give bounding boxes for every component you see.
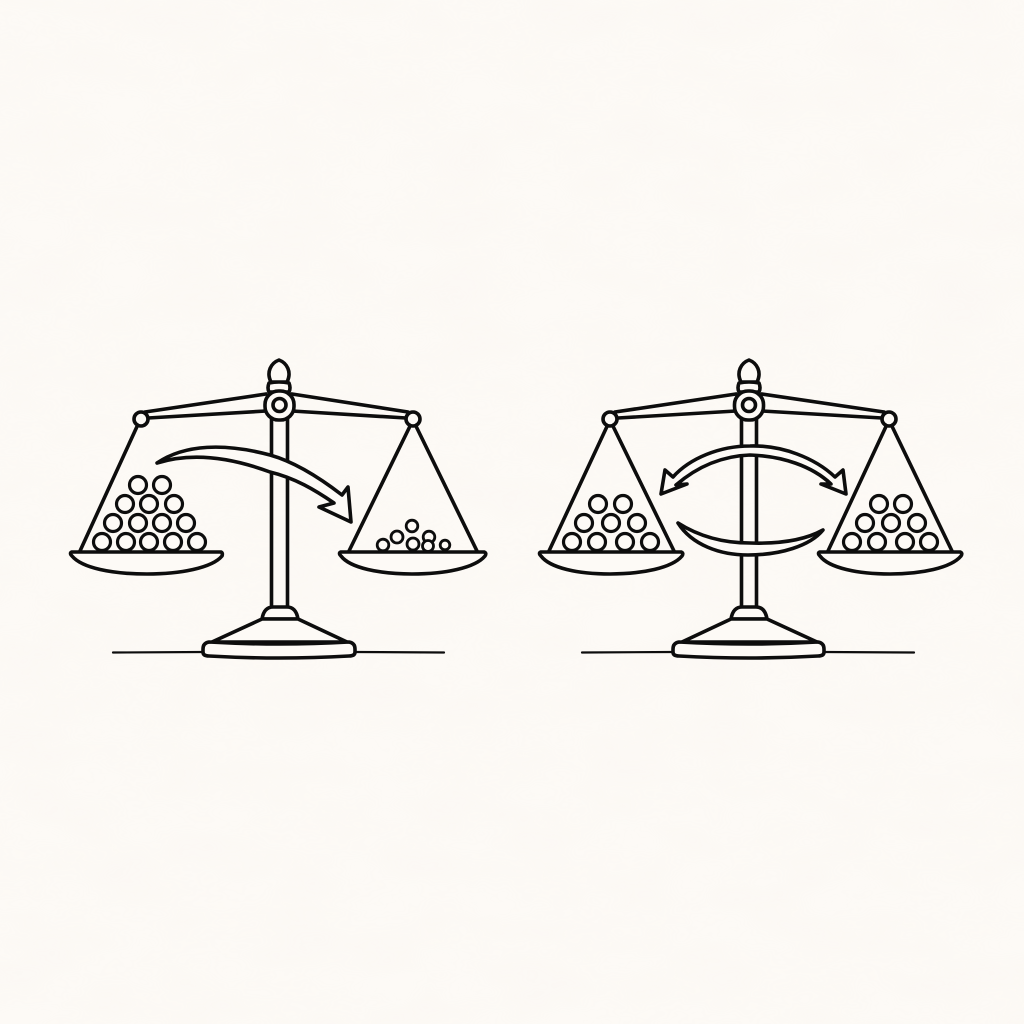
left knob	[603, 412, 617, 426]
arrow: transfer left to right	[157, 447, 351, 522]
beam	[145, 394, 408, 418]
double-headed arrow: exchange	[661, 446, 846, 494]
pivot hub	[734, 391, 764, 420]
finial	[738, 360, 760, 392]
right pan few small balls	[377, 520, 450, 552]
finial	[268, 360, 290, 392]
left pan heavy pile of balls	[94, 476, 206, 550]
base	[673, 607, 824, 658]
crescent: smile	[678, 523, 823, 555]
left knob	[134, 412, 148, 426]
left pan	[540, 552, 683, 574]
left pan strings	[549, 420, 674, 551]
right knob	[882, 412, 896, 426]
ground line	[113, 651, 444, 654]
right pan	[818, 552, 962, 574]
central post	[272, 418, 288, 608]
right pan strings	[349, 420, 477, 551]
right pan strings	[828, 420, 952, 551]
left pan	[70, 552, 222, 574]
ground line	[582, 651, 914, 654]
base	[203, 607, 355, 658]
left pan strings	[80, 420, 140, 551]
pivot hub	[265, 391, 294, 420]
panel: balanced exchange scale	[540, 360, 962, 658]
right knob	[406, 412, 420, 426]
post stem	[742, 418, 756, 608]
right pan	[340, 552, 486, 574]
panel: unbalanced transfer scale	[70, 360, 486, 658]
left pan balls	[564, 496, 658, 550]
beam	[615, 394, 884, 418]
right pan balls	[844, 496, 938, 550]
